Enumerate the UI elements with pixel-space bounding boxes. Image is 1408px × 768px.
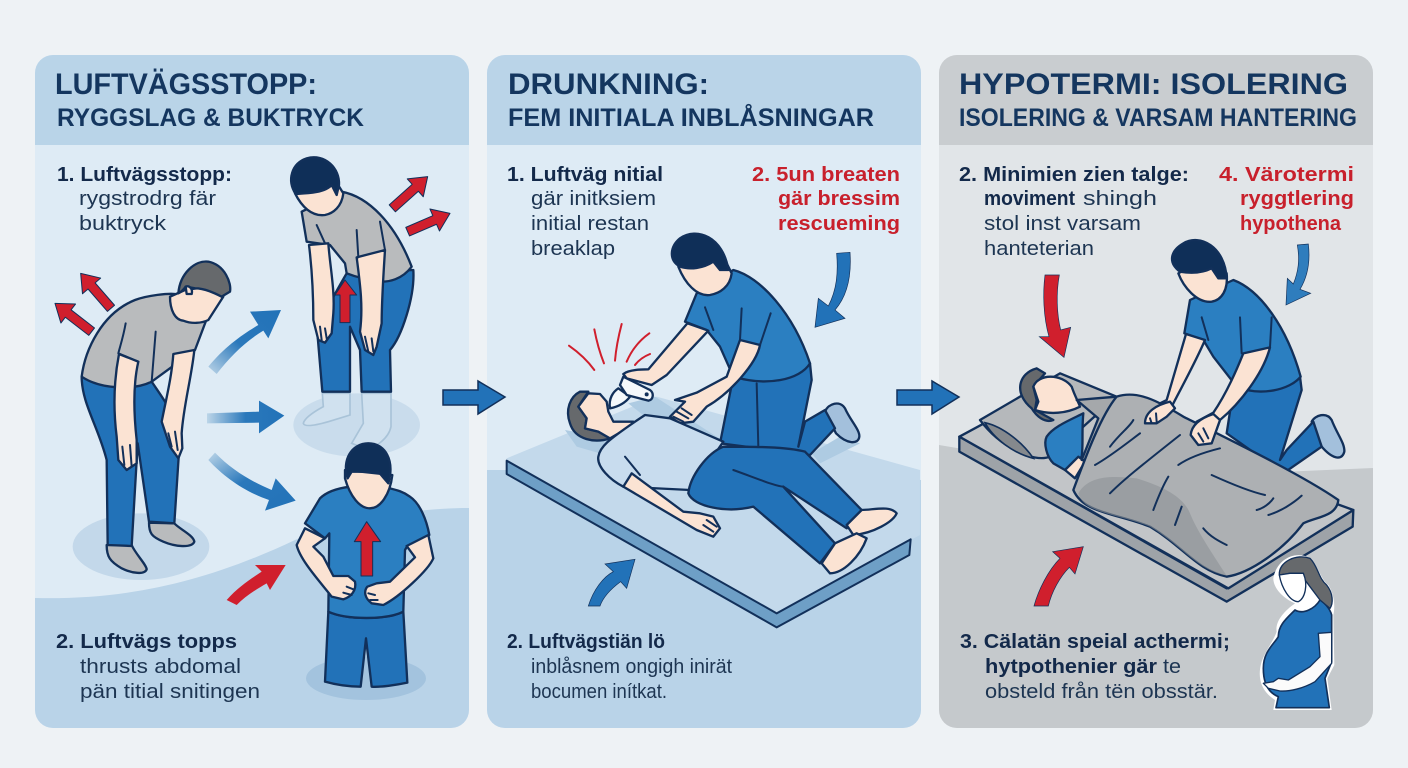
figure: patient with pillow [980, 368, 1117, 478]
mattress [959, 395, 1353, 602]
icon: blue progress arrows [207, 310, 296, 511]
text: step 2: moviment [984, 187, 1075, 210]
icon: breathing mask [610, 377, 653, 408]
text: step 2 lower: inblåsnem ongigh inirät [531, 655, 732, 678]
text: step 2: 2. Luftvägs topps [56, 630, 237, 653]
heading: hypotermi: ISOLERING & VARSAM HANTERING [959, 104, 1357, 132]
heading: luftvägsstopp: RYGGSLAG & BUKTRYCK [57, 104, 364, 132]
heading: hypotermi: HYPOTERMI: ISOLERING [959, 68, 1348, 101]
text: step 2: 2. Minimien zien talge: [959, 163, 1189, 186]
icon: red arrows from standing man [389, 177, 450, 236]
text: step 1 [57, 163, 232, 235]
text: step 1: buktryck [79, 212, 167, 235]
figures: three postures with arrows [55, 157, 450, 700]
icon: red arrow lower [227, 565, 286, 605]
text: step 1: 1. Luftväg nitial [507, 163, 663, 186]
text: step 3: hytpothenier gär [985, 655, 1157, 678]
text: step 2 lower [507, 630, 732, 703]
text: step 1: rygstrodrg fär [79, 187, 216, 210]
panel: luftvägsstopp [35, 55, 469, 728]
text: step 3: te [1163, 655, 1181, 678]
figure: abdominal thrust man [297, 443, 433, 700]
arrow: panel 1 to 2 [443, 381, 505, 414]
arrow: panel 2 to 3 [897, 381, 959, 414]
text: step 2 lower: 2. Luftvägstiän lö [507, 630, 665, 653]
figure: rescue breathing scene [507, 234, 920, 627]
text: step 1: initial restan [531, 212, 649, 235]
heading: drunkning: DRUNKNING: [508, 68, 709, 101]
icon: arrows [1034, 244, 1311, 606]
text: step 1 [507, 163, 663, 260]
heading: drunkning [508, 68, 874, 132]
text: step 2 red [752, 163, 900, 235]
text: step 2: stol inst varsam [984, 212, 1141, 235]
figure: pregnant woman [1260, 555, 1334, 710]
figure: standing bent man [291, 157, 420, 457]
figure: bent man [73, 262, 230, 580]
text: step 2: hanteterian [984, 237, 1094, 260]
text: step 2: shingh [1083, 187, 1157, 210]
heading: drunkning: FEM INITIALA INBLÅSNINGAR [508, 103, 874, 132]
text: step 4 red: 4. Värotermi [1219, 163, 1354, 186]
text: step 3 [960, 630, 1230, 703]
icon: blue arrows [588, 252, 850, 606]
figure: insulation scene [959, 240, 1353, 710]
text: step 2 [959, 163, 1189, 260]
mattress [507, 397, 920, 627]
text: step 2: pän titial snitingen [80, 680, 260, 703]
figure: kneeling helper [1144, 240, 1344, 473]
text: step 1: gär initksiem [531, 187, 656, 210]
text: step 2 lower: bocumen inítkat. [531, 680, 667, 703]
text: step 2: thrusts abdomal [80, 655, 241, 678]
text: step 1: 1. Luftvägsstopp: [57, 163, 232, 186]
text: step 2 red: rescueming [778, 212, 900, 235]
icon: red breath lines [569, 324, 650, 370]
text: step 4 red: ryggtlering [1240, 187, 1354, 210]
panel: hypotermi [939, 55, 1373, 728]
heading: hypotermi [959, 68, 1357, 132]
text: step 3: obsteld från tën obsstär. [985, 680, 1218, 703]
figure: rescuer [623, 234, 859, 455]
text: step 1: breaklap [531, 237, 615, 260]
figure: patient [568, 392, 897, 573]
panel: drunkning [487, 55, 921, 728]
text: step 2 red: 2. 5un breaten [752, 163, 900, 186]
heading: luftvägsstopp [55, 68, 364, 132]
text: step 2 red: gär bressim [778, 187, 900, 210]
text: step 4 red: hypothena [1240, 212, 1342, 235]
heading: luftvägsstopp: LUFTVÄGSSTOPP: [55, 68, 317, 101]
text: step 3: 3. Cälatän speial acthermi; [960, 630, 1230, 653]
text: step 4 red [1219, 163, 1354, 235]
icon: red arrows from bent man [55, 273, 115, 335]
text: step 2 [56, 630, 260, 703]
figure: blanket [1073, 395, 1338, 577]
